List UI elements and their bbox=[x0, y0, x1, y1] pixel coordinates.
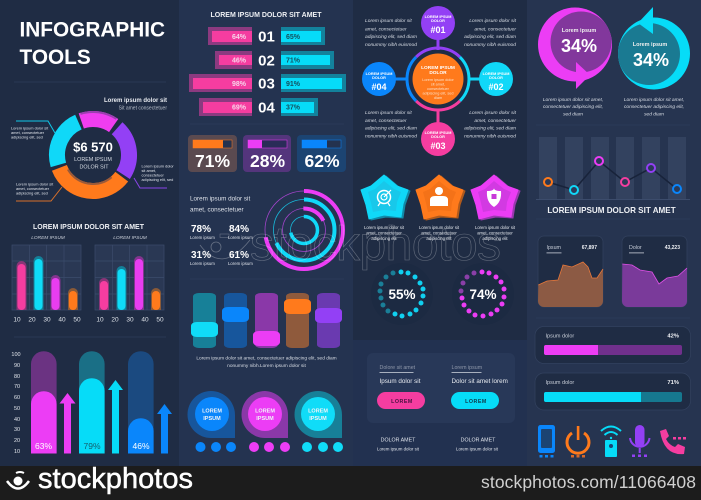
donut chart panel: adipiscing elit, sed bbox=[142, 177, 173, 182]
teardrop badges: LOREM bbox=[308, 408, 328, 414]
circular arrow: magenta: Lorem ipsum bbox=[562, 28, 596, 34]
stats text block: Lorem ipsum dolor sit bbox=[190, 196, 250, 202]
teardrop badges bbox=[188, 391, 343, 452]
title: TOOLS bbox=[20, 46, 91, 69]
progress card 42 percent: 42% bbox=[667, 334, 679, 340]
donut chart panel: Lorem ipsum dolor bbox=[142, 164, 174, 168]
donut chart panel: $6 570 bbox=[73, 140, 113, 154]
hub diagram: #04 bbox=[371, 82, 387, 92]
hub captions: Lorem ipsum dolor sit bbox=[469, 18, 517, 24]
star captions: Lorem ipsum dolor sit bbox=[419, 225, 460, 230]
bar chart left: 30 bbox=[43, 316, 51, 324]
hub captions: nonummy nibh euismod bbox=[365, 42, 417, 48]
bar chart right bbox=[95, 235, 164, 324]
circular arrow captions: Lorem ipsum dolor sit amet, bbox=[624, 97, 684, 103]
comparison bars: 98% bbox=[232, 81, 247, 88]
comparison bars: 65% bbox=[286, 34, 301, 41]
large bars with arrows: 80 bbox=[14, 374, 20, 380]
footer band: stockphotos bbox=[38, 463, 193, 495]
teardrop badges: IPSUM bbox=[309, 416, 327, 422]
button panel: Dolore sit amet bbox=[380, 365, 416, 371]
donut chart panel: Lorem ipsum dolor sit bbox=[11, 126, 49, 130]
bar chart left bbox=[12, 235, 81, 324]
stats text block: 31% bbox=[191, 250, 211, 261]
large bars with arrows: 30 bbox=[14, 427, 20, 433]
circular arrow: magenta bbox=[538, 8, 612, 89]
cylinders caption: nonummy nibh.Lorem ipsum dolor sit bbox=[227, 363, 306, 369]
donut chart panel: sit amet, bbox=[142, 168, 156, 173]
star badge: target bbox=[361, 175, 410, 220]
hub diagram: DOLOR bbox=[489, 76, 503, 80]
stats text block: Lorem ipsum bbox=[190, 261, 215, 266]
comparison bars: 37% bbox=[286, 104, 301, 112]
comparison bars: 69% bbox=[232, 104, 247, 112]
comparison bars: 01 bbox=[258, 28, 275, 46]
star captions: Lorem ipsum dolor sit bbox=[475, 225, 516, 230]
circular arrow: cyan: Lorem ipsum bbox=[633, 42, 667, 48]
bar chart right: 50 bbox=[156, 316, 164, 324]
circular arrow captions: Lorem ipsum dolor sit amet, bbox=[543, 97, 603, 103]
hub captions: amet, consectetuer bbox=[365, 118, 407, 124]
star badge: shield bbox=[471, 175, 520, 220]
hub diagram: #02 bbox=[488, 82, 504, 92]
star captions: adipiscing elit bbox=[482, 236, 508, 241]
area chart: ipsum: Ipsum bbox=[546, 245, 562, 251]
button panel: Ipsum dolor sit bbox=[380, 378, 421, 385]
comparison bars: 91% bbox=[286, 81, 301, 88]
donut chart panel: amet, consectetuer bbox=[16, 186, 50, 191]
donut chart panel bbox=[11, 98, 174, 209]
hub diagram: sit amet, bbox=[431, 82, 445, 86]
button panel: Lorem ipsum bbox=[452, 365, 483, 371]
hub diagram: LOREM IPSUM bbox=[421, 65, 455, 71]
circular arrow captions bbox=[543, 97, 684, 118]
stats text block: amet, consectetuer bbox=[190, 206, 244, 214]
slider cylinders bbox=[191, 293, 342, 348]
percent tiles: 71% bbox=[195, 151, 230, 171]
bar chart right: 20 bbox=[111, 316, 119, 324]
large bars with arrows: 40 bbox=[14, 417, 20, 423]
circular arrow captions: sed diam bbox=[644, 112, 664, 118]
hub diagram: #01 bbox=[430, 25, 446, 35]
large bars with arrows: 100 bbox=[11, 352, 21, 358]
donut chart panel: LOREM IPSUM bbox=[74, 157, 112, 163]
cylinders caption bbox=[196, 356, 337, 369]
bar chart right: 40 bbox=[141, 316, 149, 324]
title bbox=[20, 18, 165, 69]
line chart bbox=[536, 137, 690, 200]
title: INFOGRAPHIC bbox=[20, 18, 165, 42]
teardrop badges: IPSUM bbox=[203, 416, 221, 422]
progress card 71 percent bbox=[535, 373, 690, 410]
button panel captions: DOLOR AMET bbox=[461, 438, 496, 444]
button panel: LOREM bbox=[391, 399, 413, 405]
circular arrow: magenta: 34% bbox=[561, 36, 597, 56]
icon: power bbox=[567, 426, 589, 458]
comparison bars: 64% bbox=[232, 34, 247, 41]
area chart: dolor bbox=[622, 236, 687, 307]
star captions: adipiscing elit bbox=[371, 236, 397, 241]
large bars with arrows: 50 bbox=[14, 406, 20, 412]
hub captions: amet, consectetuer bbox=[474, 118, 516, 124]
bar chart right: LOREM IPSUM bbox=[113, 235, 147, 241]
hub diagram: DOLOR bbox=[372, 76, 386, 80]
hub diagram: DOLOR bbox=[431, 19, 445, 23]
hub diagram: LOREM IPSUM bbox=[483, 72, 509, 76]
progress card 42 percent: Ipsum dolor bbox=[546, 334, 574, 340]
hub diagram: Lorem ipsum dolor bbox=[422, 78, 454, 82]
bar chart right: 10 bbox=[96, 316, 104, 324]
button panel captions: Lorem ipsum dolor sit bbox=[456, 446, 499, 452]
bar chart left: 50 bbox=[73, 316, 81, 324]
hub captions: Lorem ipsum dolor sit bbox=[469, 110, 517, 116]
teardrop badges: LOREM bbox=[202, 408, 222, 414]
bar chart left: 10 bbox=[13, 316, 21, 324]
teardrop badges: IPSUM bbox=[256, 416, 274, 422]
hub captions: adipiscing elit, sed diam bbox=[464, 126, 516, 132]
comparison bars: 03 bbox=[258, 76, 275, 92]
hub diagram bbox=[362, 6, 513, 156]
star captions: amet, consectetuer bbox=[477, 230, 513, 236]
large bars with arrows: 20 bbox=[14, 438, 20, 444]
button panel captions bbox=[377, 438, 499, 452]
star captions: Lorem ipsum dolor sit bbox=[364, 225, 405, 230]
area chart: ipsum bbox=[538, 236, 603, 307]
hub captions: Lorem ipsum dolor sit bbox=[365, 110, 412, 116]
percent tiles: 28% bbox=[250, 151, 285, 171]
stats text block: Lorem ipsum bbox=[190, 235, 215, 240]
circular arrow: cyan bbox=[618, 7, 690, 90]
hub diagram: diam bbox=[434, 96, 442, 100]
donut chart panel: Sit amet consectetuer bbox=[119, 106, 167, 112]
hub diagram: DOLOR bbox=[429, 70, 447, 76]
button panel captions: Lorem ipsum dolor sit bbox=[377, 446, 420, 452]
footer band bbox=[0, 463, 701, 500]
donut chart panel: Lorem ipsum dolor sit bbox=[104, 98, 167, 104]
progress card 42 percent bbox=[535, 326, 690, 364]
comparison bars: 46% bbox=[232, 58, 247, 64]
star captions: adipiscing elit bbox=[426, 236, 452, 241]
comparison bars: 04 bbox=[258, 100, 275, 116]
donut chart panel: consectetuer bbox=[142, 172, 164, 178]
area chart: dolor: Dolor bbox=[629, 245, 642, 251]
bar chart left: 40 bbox=[58, 316, 66, 324]
stats text block: 61% bbox=[229, 250, 249, 261]
hub captions: nonummy nibh euismod bbox=[365, 134, 417, 140]
teardrop badges: LOREM bbox=[255, 408, 275, 414]
percent tiles: 62% bbox=[304, 151, 340, 171]
large bars with arrows: 90 bbox=[14, 363, 20, 369]
stats text block: Lorem ipsum bbox=[228, 235, 253, 240]
button panel: LOREM bbox=[465, 399, 487, 405]
footer band: stockphotos.com/11066408 bbox=[481, 472, 696, 492]
large bars with arrows: 70 bbox=[14, 384, 20, 390]
dial 74 percent bbox=[452, 263, 514, 325]
area chart: dolor: 43,223 bbox=[665, 245, 680, 251]
hub diagram: adipiscing elit, sed bbox=[422, 92, 454, 96]
dial 55 percent bbox=[371, 263, 433, 325]
icon: microphone bbox=[630, 425, 650, 457]
button panel bbox=[367, 353, 515, 423]
star captions: amet, consectetuer bbox=[421, 230, 457, 236]
hub captions: amet, consectetuer bbox=[365, 26, 407, 32]
donut chart panel: Lorem ipsum dolor sit bbox=[16, 182, 54, 186]
donut chart panel: adipiscing elit, sed bbox=[16, 190, 48, 196]
star captions bbox=[364, 225, 516, 241]
icon: smartphone bbox=[538, 425, 555, 458]
large bars with arrows bbox=[11, 351, 172, 455]
hub diagram: #03 bbox=[430, 141, 446, 151]
hub captions: adipiscing elit, sed diam bbox=[464, 34, 516, 40]
donut chart panel: amet, consectetuer bbox=[11, 130, 45, 135]
progress card 71 percent: 71% bbox=[667, 380, 679, 386]
icon: phone call bbox=[660, 429, 686, 454]
stats text block bbox=[190, 196, 253, 266]
comparison bars: 71% bbox=[286, 58, 301, 64]
stats text block: Lorem ipsum bbox=[228, 261, 253, 266]
stats text block: 78% bbox=[191, 224, 211, 235]
cylinders caption: Lorem ipsum dolor sit amet, consectetuer adipiscing elit, sed diam bbox=[196, 356, 337, 362]
heading: line chart: LOREM IPSUM DOLOR SIT AMET bbox=[547, 206, 676, 215]
hub diagram: consectetuer bbox=[427, 87, 450, 91]
bar chart left: LOREM IPSUM bbox=[31, 235, 65, 241]
hub captions: nonummy nibh euismod bbox=[464, 42, 516, 48]
button panel: Dolor sit amet lorem bbox=[452, 378, 508, 385]
concentric ring chart bbox=[265, 191, 343, 269]
hub captions: nonummy nibh euismod bbox=[464, 134, 516, 140]
icon: remote bbox=[601, 426, 621, 457]
heading: comparison: LOREM IPSUM DOLOR SIT AMET bbox=[211, 12, 322, 19]
stats text block: 84% bbox=[229, 224, 249, 235]
large bars with arrows: 10 bbox=[14, 449, 20, 455]
large bars with arrows: 63% bbox=[35, 441, 52, 451]
circular arrow captions: consectetuer adipiscing elit, bbox=[624, 104, 684, 110]
donut chart panel: DOLOR SIT bbox=[79, 164, 109, 170]
heading: bar charts: LOREM IPSUM DOLOR SIT AMET bbox=[33, 224, 145, 231]
watermark outline: stockphotos bbox=[250, 218, 501, 271]
hub captions: Lorem ipsum dolor sit bbox=[365, 18, 412, 24]
comparison bars bbox=[189, 27, 346, 116]
large bars with arrows: 60 bbox=[14, 395, 20, 401]
dial 74 percent: 74% bbox=[469, 287, 497, 302]
large bars with arrows: 79% bbox=[83, 441, 101, 451]
button panel captions: DOLOR AMET bbox=[381, 438, 416, 444]
comparison bars: 02 bbox=[258, 52, 275, 70]
donut chart panel: adipiscing elit, sed bbox=[11, 134, 43, 140]
circular arrow captions: sed diam bbox=[563, 112, 583, 118]
hub diagram: DOLOR bbox=[431, 135, 445, 139]
progress card 71 percent: Ipsum dolor bbox=[546, 380, 574, 386]
large bars with arrows: 46% bbox=[132, 441, 150, 451]
circular arrow captions: consectetuer adipiscing elit, bbox=[543, 104, 603, 110]
hub diagram: LOREM IPSUM bbox=[366, 72, 392, 76]
circular arrow: cyan: 34% bbox=[633, 50, 669, 70]
hub diagram: LOREM IPSUM bbox=[425, 131, 451, 135]
star captions: amet, consectetuer bbox=[366, 230, 402, 236]
hub captions: adipiscing elit, sed diam bbox=[365, 34, 417, 40]
hub captions: amet, consectetuer bbox=[474, 26, 516, 32]
hub captions: adipiscing elit, sed diam bbox=[365, 126, 417, 132]
bar chart right: 30 bbox=[126, 316, 134, 324]
hub diagram: LOREM IPSUM bbox=[425, 15, 451, 19]
dial 55 percent: 55% bbox=[388, 287, 416, 302]
percent tiles bbox=[188, 135, 346, 172]
star badge: person bbox=[416, 175, 465, 220]
bar chart left: 20 bbox=[28, 316, 36, 324]
hub captions bbox=[365, 18, 517, 140]
area chart: ipsum: 67,897 bbox=[582, 245, 597, 251]
